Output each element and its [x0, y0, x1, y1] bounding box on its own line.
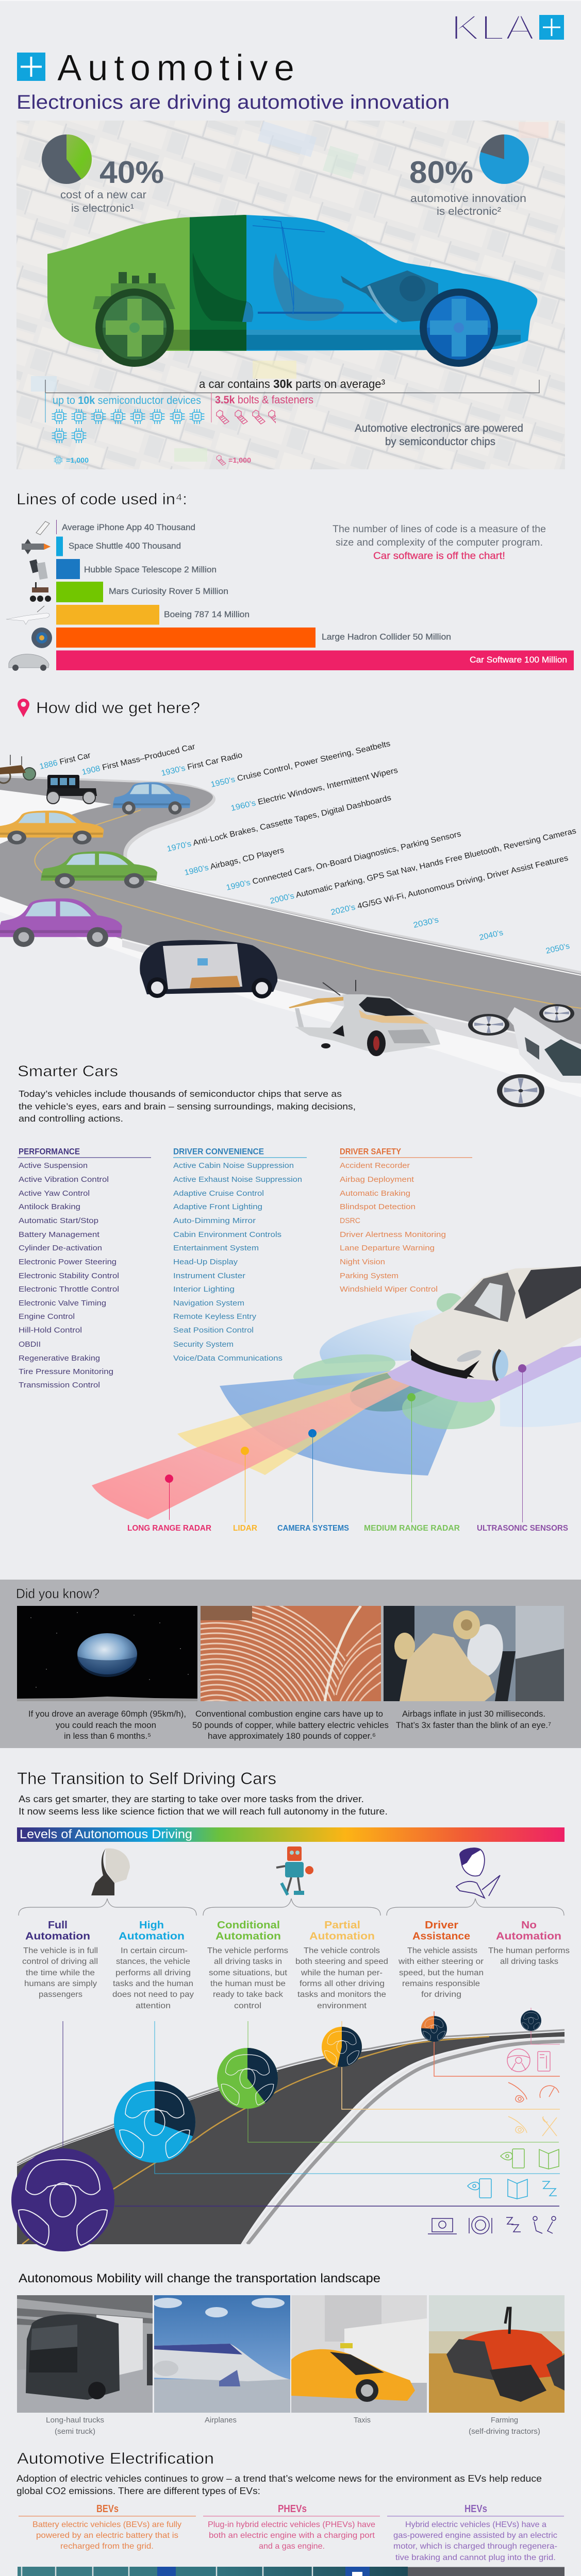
callout: lidar — [233, 1447, 257, 1533]
level: high automation — [112, 1920, 194, 2010]
fact: moon distance: If you drove an average 60mph (95km/h), — [28, 1709, 186, 1719]
row: Large Hadron Collider: Large Hadron Collider 50 Million — [322, 632, 451, 642]
fact: copper: Conventional combustion engine cars have up to — [195, 1709, 383, 1719]
text: transition intro — [19, 1794, 388, 1817]
steering wheel: level none — [521, 2010, 541, 2031]
column: BEVs: BEVs — [96, 2503, 119, 2515]
fact: airbags: Airbags inflate in just 30 milliseconds. — [402, 1709, 545, 1719]
pie: 80 percent innovation: 80% — [409, 155, 473, 190]
photo: copper coil — [201, 1606, 381, 1701]
car wheel right — [420, 289, 498, 367]
vehicle: yellow 1950s car — [0, 810, 104, 844]
car wheel left — [95, 289, 174, 367]
level: driver assistance: for driving — [421, 1990, 461, 1999]
level: no automation: Automation — [496, 1931, 561, 1942]
column: performance: Active Vibration Control — [19, 1175, 109, 1184]
column: driver convenience: Interior Lighting — [173, 1285, 235, 1294]
bar chart: lines of code — [6, 520, 574, 671]
photo: earth from the moon — [17, 1606, 197, 1701]
heading: automotive electrification: Automotive Electrification — [17, 2449, 214, 2467]
car cutaway green and blue — [41, 211, 545, 367]
timeline labels: 1970’s Anti-Lock Brakes, Cassette Tapes, Digital Dashboards — [166, 793, 392, 854]
level: high automation: stances, the vehicle — [116, 1957, 190, 1966]
column: driver safety: Automatic Braking — [340, 1189, 410, 1198]
pie: 80 percent innovation: automotive innovation — [410, 193, 526, 205]
row: Boeing — [6, 605, 250, 624]
column: driver convenience: Auto-Dimming Mirror — [173, 1216, 256, 1225]
vehicle: passenger drone — [468, 1004, 581, 1107]
note: code complexity: Car software is off the chart! — [373, 551, 505, 562]
level: high automation: performs all driving — [115, 1969, 191, 1977]
icons: partial automation tasks — [508, 2116, 557, 2136]
level: full automation — [22, 1920, 98, 1999]
title: Automotive: Automotive — [57, 48, 294, 89]
captions: mobility photos: Taxis — [354, 2416, 371, 2425]
level: no automation: The human performs — [488, 1946, 570, 1955]
column: PHEVs: Plug-in hybrid electric vehicles (PHEVs) have — [208, 2520, 375, 2529]
pie: 40 percent cost — [42, 134, 164, 214]
level: driver assistance: Assistance — [412, 1931, 470, 1942]
timeline labels: 1930’s First Car Radio — [160, 751, 243, 778]
pie: 40 percent cost: is electronic¹ — [71, 202, 134, 214]
column: performance: Active Suspension — [19, 1161, 88, 1170]
column: performance: Automatic Start/Stop — [19, 1216, 98, 1225]
fact: airbags: That’s 3x faster than the blink of an eye.⁷ — [396, 1721, 551, 1730]
fact: moon distance — [28, 1709, 186, 1741]
heading: transition to self driving: The Transition to Self Driving Cars — [17, 1769, 276, 1788]
timeline labels — [39, 739, 577, 956]
timeline labels: 2040’s — [478, 928, 504, 942]
column: PHEVs: and a gas engine. — [259, 2542, 325, 2551]
semiconductor devices pictogram: up to 10k semiconductor devices — [53, 395, 201, 406]
level: full automation: the time while the — [26, 1969, 95, 1977]
fact: copper: 50 pounds of copper, while battery electric vehicles — [192, 1721, 389, 1730]
note: code complexity — [333, 524, 546, 562]
logo: KLA header — [451, 8, 564, 47]
text: smarter cars intro: and controlling actions. — [19, 1113, 123, 1124]
timeline labels: 1908 First Mass–Produced Car — [81, 742, 196, 777]
steering wheel: level conditional — [217, 2048, 278, 2109]
fact: copper: have approximately 180 pounds of copper.⁶ — [208, 1732, 376, 1741]
column: BEVs: recharged from the grid. — [60, 2542, 154, 2551]
bolts and fasteners pictogram: 3.5k bolts & fasteners — [215, 394, 313, 406]
column: performance: PERFORMANCE — [19, 1147, 80, 1156]
column: driver convenience: Active Exhaust Noise Suppression — [173, 1175, 302, 1184]
level: driver assistance: speed, but the human — [399, 1969, 484, 1977]
column: performance: Hill-Hold Control — [19, 1326, 82, 1334]
level: conditional automation: Conditional — [217, 1920, 280, 1931]
vehicle: purple SUV — [0, 899, 122, 947]
column: performance: Regenerative Braking — [19, 1354, 100, 1363]
column: performance: Tire Pressure Monitoring — [19, 1367, 113, 1376]
captions: mobility photos: (self-driving tractors) — [469, 2427, 540, 2436]
column: driver convenience: Navigation System — [173, 1299, 244, 1308]
steering wheel: level high — [114, 2081, 195, 2163]
vehicle: flying car — [289, 980, 440, 1056]
column: driver safety: Lane Departure Warning — [340, 1244, 435, 1252]
vehicle: black sedan 1908 — [46, 775, 97, 804]
subtitle: Electronics are driving automotive innovation — [16, 92, 450, 113]
column: performance: Electronic Throttle Control — [19, 1285, 119, 1294]
column: driver convenience: Instrument Cluster — [173, 1272, 245, 1280]
column: driver safety: Night Vision — [340, 1258, 385, 1266]
photo: long-haul truck — [17, 2295, 153, 2413]
column: driver convenience — [173, 1147, 307, 1363]
level: full automation: humans are simply — [24, 1979, 97, 1988]
level: high automation: tasks and the human — [113, 1979, 193, 1988]
column: driver convenience: Adaptive Cruise Control — [173, 1189, 264, 1198]
pie: 40 percent cost: cost of a new car — [60, 189, 146, 201]
vehicle: antique car — [0, 755, 36, 783]
heading: lines of code: Lines of code used in⁴: — [16, 490, 187, 508]
level: driver assistance: remains responsible — [402, 1979, 480, 1988]
column: performance: Cylinder De-activation — [19, 1244, 102, 1252]
timeline labels: 2030’s — [412, 916, 440, 930]
level: driver assistance: The vehicle assists — [407, 1946, 477, 1955]
row: car software: Car Software 100 Million — [470, 655, 567, 665]
column: driver convenience: Security System — [173, 1340, 234, 1349]
level: conditional automation — [207, 1920, 288, 2010]
callout: long range radar: LONG RANGE RADAR — [127, 1524, 211, 1533]
steering wheel: level full — [11, 2148, 114, 2251]
column: BEVs: Battery electric vehicles (BEVs) are fully — [32, 2520, 181, 2529]
column: driver safety: Accident Recorder — [340, 1161, 410, 1170]
timeline labels: 2050’s — [545, 942, 571, 956]
leader lines — [63, 2008, 560, 2206]
column: driver safety: Airbag Deployment — [340, 1175, 414, 1184]
level: high automation: In certain circum- — [121, 1946, 188, 1955]
text: smarter cars intro: Today’s vehicles include thousands of semiconductor chips that serve as — [19, 1089, 342, 1099]
callout: medium range radar — [364, 1393, 460, 1533]
column: driver safety: Parking System — [340, 1272, 399, 1280]
row: Boeing: Boeing 787 14 Million — [164, 609, 250, 619]
parts bracket and total: a car contains 30k parts on average³ — [199, 377, 385, 391]
level: conditional automation: some situations, but — [209, 1969, 288, 1977]
level: partial automation: forms all other driving — [300, 1979, 385, 1988]
row: space shuttle — [22, 537, 181, 556]
level: no automation: No — [521, 1920, 537, 1931]
level: conditional automation: all driving tasks in — [214, 1957, 282, 1966]
text: EV intro: Adoption of electric vehicles continues to grow – a trend that’s welcome news for the environment as EVs help reduce — [16, 2473, 542, 2484]
icons: no automation tasks — [507, 2049, 550, 2072]
text: smarter cars intro: the vehicle’s eyes, ears and brain – sensing surroundings, making decisions, — [19, 1101, 356, 1112]
column: HEVs: HEVs — [464, 2503, 487, 2515]
level: partial automation: while the human per- — [301, 1969, 383, 1977]
level: partial automation — [295, 1920, 388, 2010]
autonomy road — [17, 2030, 565, 2244]
column: performance: Electronic Valve Timing — [19, 1299, 106, 1308]
column: performance: OBDII — [19, 1340, 41, 1349]
brackets — [19, 1899, 564, 1916]
column: performance — [18, 1147, 151, 1389]
level: full automation: Full — [48, 1920, 68, 1931]
level: partial automation: Partial — [324, 1920, 360, 1931]
column: driver safety: Windshield Wiper Control — [340, 1285, 438, 1294]
row: car software — [9, 650, 574, 671]
fact: moon distance: in less than 6 months.⁵ — [64, 1732, 151, 1741]
callout: lidar: LIDAR — [233, 1524, 257, 1533]
note: powered by chips — [355, 422, 523, 448]
row: space shuttle: Space Shuttle 400 Thousand — [69, 541, 181, 551]
level: conditional automation: The vehicle performs — [207, 1946, 288, 1955]
row: Hubble — [29, 559, 217, 580]
column: performance: Transmission Control — [19, 1381, 100, 1389]
column: PHEVs: PHEVs — [278, 2503, 307, 2515]
level: full automation: passengers — [39, 1990, 82, 1999]
level: partial automation: tasks and monitors the — [297, 1990, 386, 1999]
level: high automation: Automation — [119, 1931, 185, 1942]
figure: robot — [276, 1846, 313, 1895]
text: EV intro: global CO2 emissions. There are different types of EVs: — [16, 2486, 260, 2496]
photo: crash test dummy and airbag — [384, 1606, 564, 1701]
bolts and fasteners pictogram: =1,000 — [228, 456, 251, 464]
note: powered by chips: Automotive electronics are powered — [355, 422, 523, 434]
column: driver convenience: Entertainment System — [173, 1244, 259, 1252]
row: iPhone app: Average iPhone App 40 Thousand — [62, 522, 195, 532]
timeline labels: 1950’s Cruise Control, Power Steering, Seatbelts — [210, 739, 391, 789]
level: conditional automation: ready to take back — [213, 1990, 283, 1999]
column: performance: Antilock Braking — [19, 1202, 80, 1211]
level: conditional automation: control — [234, 2002, 261, 2010]
icons: conditional automation tasks — [501, 2149, 559, 2169]
parts bracket and total — [45, 377, 539, 393]
bolts and fasteners pictogram — [211, 393, 313, 465]
panel: EV country leaders — [408, 2567, 565, 2576]
semiconductor devices pictogram: =1,000 — [66, 456, 89, 464]
level: partial automation: environment — [317, 2002, 367, 2010]
level: no automation — [488, 1920, 570, 1966]
panel: hero car and electronics share — [16, 121, 565, 469]
captions: mobility photos: Airplanes — [205, 2416, 237, 2425]
callout: camera systems: CAMERA SYSTEMS — [277, 1524, 349, 1533]
column: PHEVs — [203, 2503, 380, 2551]
level: partial automation: Automation — [309, 1931, 375, 1942]
callout: ultrasonic sensors — [477, 1364, 568, 1533]
level: full automation: control of driving all — [22, 1957, 98, 1966]
panel: did you know — [0, 1580, 581, 1748]
level: full automation: Automation — [25, 1931, 90, 1942]
photo: airplane — [153, 2295, 290, 2413]
steering wheel: level partial — [322, 2027, 362, 2067]
gradient bar: levels of autonomous driving: Levels of Autonomous Driving — [20, 1827, 192, 1841]
column: performance: Engine Control — [19, 1312, 75, 1321]
column: driver safety: DRIVER SAFETY — [340, 1147, 402, 1156]
level: high automation: does not need to pay — [112, 1990, 194, 1999]
column: HEVs — [387, 2503, 564, 2562]
sensor diagram: car with sensing fields — [92, 1266, 581, 1519]
heading: How did we get here: How did we get here? — [36, 699, 200, 717]
photo: farming tractor — [429, 2295, 565, 2413]
text: transition intro: It now seems less like science fiction that we will reach full autonomy in the future. — [19, 1806, 388, 1817]
row: iPhone app — [36, 520, 195, 535]
photo: taxi — [291, 2295, 427, 2413]
level: high automation: attention — [136, 2002, 171, 2010]
steering wheel: level driver assistance — [421, 2016, 447, 2042]
column: driver convenience: Head-Up Display — [173, 1258, 238, 1266]
fact: copper — [192, 1709, 389, 1741]
column: performance: Battery Management — [19, 1230, 100, 1239]
timeline road — [0, 775, 581, 1097]
level: conditional automation: Automation — [215, 1931, 281, 1942]
column: driver safety — [340, 1147, 472, 1294]
icons: driver assistance tasks — [508, 2082, 559, 2102]
captions: mobility photos — [46, 2416, 540, 2436]
note: code complexity: size and complexity of the computer program. — [336, 537, 543, 548]
column: BEVs — [19, 2503, 196, 2551]
captions: mobility photos: Long-haul trucks — [46, 2416, 104, 2425]
column: performance: Electronic Power Steering — [19, 1258, 117, 1266]
column: HEVs: gas-powered engine assisted by an electric — [393, 2531, 557, 2540]
level: no automation: all driving tasks — [500, 1957, 558, 1966]
timeline labels: 1960’s Electric Windows, Intermittent Wipers — [230, 766, 399, 813]
column: BEVs: powered by an electric battery that is — [36, 2531, 178, 2540]
level: partial automation: both steering and speed — [295, 1957, 388, 1966]
vehicle: autonomous pod — [140, 940, 277, 998]
level: driver assistance: with either steering or — [398, 1957, 484, 1966]
vehicle: blue 1930s car — [113, 782, 190, 815]
column: driver safety: Blindspot Detection — [340, 1202, 416, 1211]
column: HEVs: motor, which is charged through regenera- — [393, 2542, 557, 2551]
semiconductor devices pictogram — [45, 393, 204, 464]
vehicle: green sedan — [41, 851, 157, 888]
captions: mobility photos: Farming — [491, 2416, 518, 2425]
column: driver convenience: Adaptive Front Lighting — [173, 1202, 262, 1211]
captions: mobility photos: (semi truck) — [55, 2427, 95, 2436]
timeline labels: 1886 First Car — [39, 751, 91, 771]
column: performance: Active Yaw Control — [19, 1189, 90, 1198]
column: performance: Electronic Stability Control — [19, 1272, 119, 1280]
level: driver assistance — [398, 1920, 484, 1999]
icons: high automation tasks — [468, 2179, 557, 2199]
row: Hubble: Hubble Space Telescope 2 Million — [84, 565, 217, 574]
column: driver convenience: Active Cabin Noise Suppression — [173, 1161, 294, 1170]
heading: did you know: Did you know? — [16, 1586, 99, 1601]
heading: autonomous mobility: Autonomous Mobility will change the transportation landscape — [19, 2272, 380, 2285]
figure: cyborg — [91, 1849, 130, 1895]
level: conditional automation: the human must be — [210, 1979, 286, 1988]
row: Large Hadron Collider — [31, 628, 451, 648]
timeline labels: 1980’s Airbags, CD Players — [184, 846, 285, 877]
figure: pointing man — [456, 1848, 500, 1898]
callout: medium range radar: MEDIUM RANGE RADAR — [364, 1524, 460, 1533]
heading: Smarter Cars: Smarter Cars — [18, 1063, 118, 1080]
logo: KLA header: KLA — [451, 8, 535, 47]
fact: moon distance: you could reach the moon — [56, 1721, 156, 1730]
column: driver convenience: Remote Keyless Entry — [173, 1312, 257, 1321]
car body front view — [409, 1266, 581, 1381]
column: driver convenience: Voice/Data Communications — [173, 1354, 283, 1363]
pie: 40 percent cost: 40% — [99, 155, 164, 190]
timeline labels: 2000’s Automatic Parking, GPS Sat Nav, Hands Free Bluetooth, Reversing Cameras — [269, 826, 577, 906]
column: driver convenience: Seat Position Control — [173, 1326, 254, 1334]
column: HEVs: tive braking and cannot plug into the grid. — [395, 2553, 556, 2562]
level: driver assistance: Driver — [425, 1920, 458, 1931]
column: driver safety: DSRC — [340, 1216, 360, 1225]
icons: full automation tasks — [428, 2216, 556, 2234]
text: EV intro — [16, 2473, 542, 2496]
callout: ultrasonic sensors: ULTRASONIC SENSORS — [477, 1524, 568, 1533]
text: transition intro: As cars get smarter, they are starting to take over more tasks from the driver. — [19, 1794, 364, 1804]
level: full automation: The vehicle is in full — [23, 1946, 98, 1955]
row: Mars rover — [30, 582, 228, 602]
gradient bar: levels of autonomous driving — [17, 1827, 565, 1842]
level: high automation: High — [139, 1920, 164, 1931]
timeline labels: 2020’s 4G/5G Wi-Fi, Autonomous Driving, Driver Assist Features — [330, 854, 569, 917]
pie: 80 percent innovation — [409, 134, 529, 217]
column: driver convenience: Cabin Environment Controls — [173, 1230, 281, 1239]
pie: 80 percent innovation: is electronic² — [437, 206, 501, 217]
timeline labels: 1990’s Connected Cars, On-Board Diagnostics, Parking Sensors — [225, 829, 462, 892]
note: code complexity: The number of lines of code is a measure of the — [333, 524, 546, 535]
photo: EV charging with transparent car — [18, 2567, 408, 2576]
column: PHEVs: both an electric engine with a charging port — [209, 2531, 375, 2540]
callout: camera systems — [277, 1429, 349, 1533]
column: driver convenience: DRIVER CONVENIENCE — [173, 1147, 264, 1156]
text: smarter cars intro — [19, 1089, 356, 1124]
callout: long range radar — [127, 1475, 211, 1533]
fact: airbags — [396, 1709, 551, 1730]
column: HEVs: Hybrid electric vehicles (HEVs) have a — [405, 2520, 546, 2529]
note: powered by chips: by semiconductor chips — [385, 436, 495, 448]
level: partial automation: The vehicle controls — [304, 1946, 380, 1955]
column: driver safety: Driver Alertness Monitoring — [340, 1230, 446, 1239]
row: Mars rover: Mars Curiosity Rover 5 Million — [109, 586, 228, 596]
